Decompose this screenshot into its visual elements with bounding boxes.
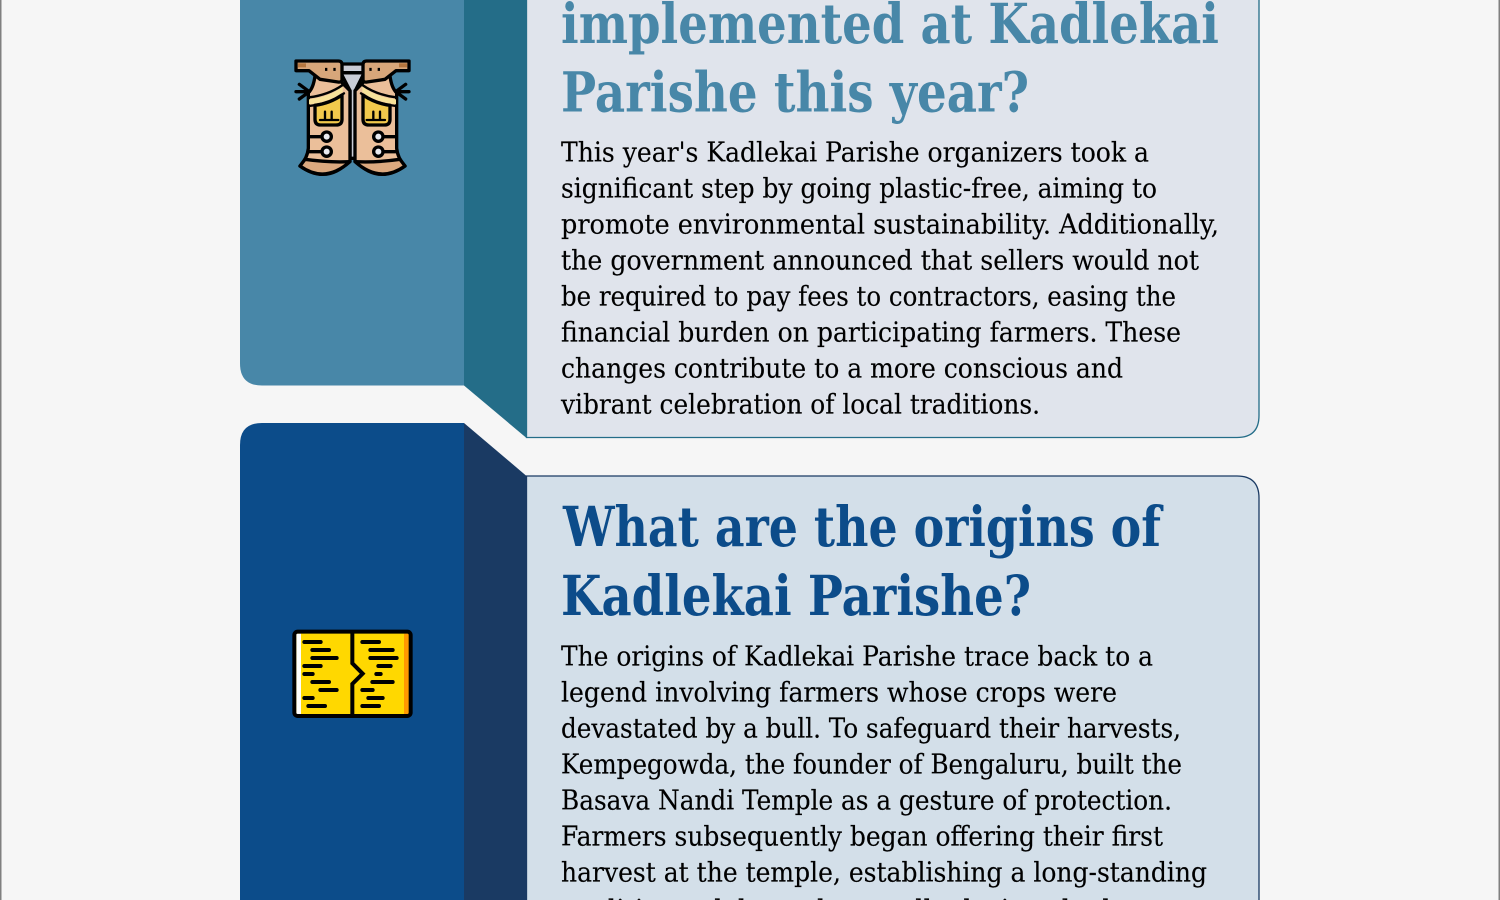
body text: plastic-free: promote environmental sustainability. Additionally, [561, 208, 1219, 240]
body text: plastic-free: changes contribute to a more conscious and [561, 352, 1123, 384]
fold [464, 423, 526, 900]
fold [464, 0, 526, 438]
icon: torn book [294, 632, 411, 716]
body text: plastic-free: significant step by going plastic-free, aiming to [561, 172, 1157, 204]
heading: plastic-free: Parishe this year? [561, 60, 1029, 124]
left colour block [240, 0, 464, 386]
text card [526, 476, 1259, 900]
heading: origins: Kadlekai Parishe? [561, 563, 1031, 628]
body text: origins: The origins of Kadlekai Parishe trace back to a [561, 640, 1153, 672]
body text: plastic-free: the government announced that sellers would not [561, 244, 1199, 276]
body text: origins: legend involving farmers whose crops were [561, 676, 1117, 708]
body text: plastic-free: vibrant celebration of local traditions. [560, 388, 1040, 420]
heading: origins: What are the origins of [562, 494, 1164, 559]
heading: plastic-free [561, 0, 1219, 124]
body text: plastic-free: be required to pay fees to contractors, easing the [561, 280, 1176, 312]
body text: plastic-free: This year's Kadlekai Parishe organizers took a [561, 136, 1149, 168]
text card [526, 0, 1259, 438]
body text: origins: Kempegowda, the founder of Bengaluru, built the [561, 748, 1182, 780]
icon: chaps [296, 61, 409, 174]
panel: origins section [240, 423, 1259, 900]
heading: origins [561, 494, 1164, 628]
body text: origins: Basava Nandi Temple as a gesture of protection. [561, 784, 1172, 816]
body text: origins [561, 640, 1207, 900]
left colour block [240, 423, 464, 900]
body text: plastic-free [560, 136, 1219, 420]
body text: origins: Farmers subsequently began offering their first [561, 820, 1163, 852]
body text: origins: harvest at the temple, establishing a long-standing [561, 856, 1207, 888]
body text: plastic-free: financial burden on participating farmers. These [561, 316, 1181, 348]
body text: origins: devastated by a bull. To safeguard their harvests, [561, 712, 1181, 744]
panel: plastic-free section [240, 0, 1259, 438]
